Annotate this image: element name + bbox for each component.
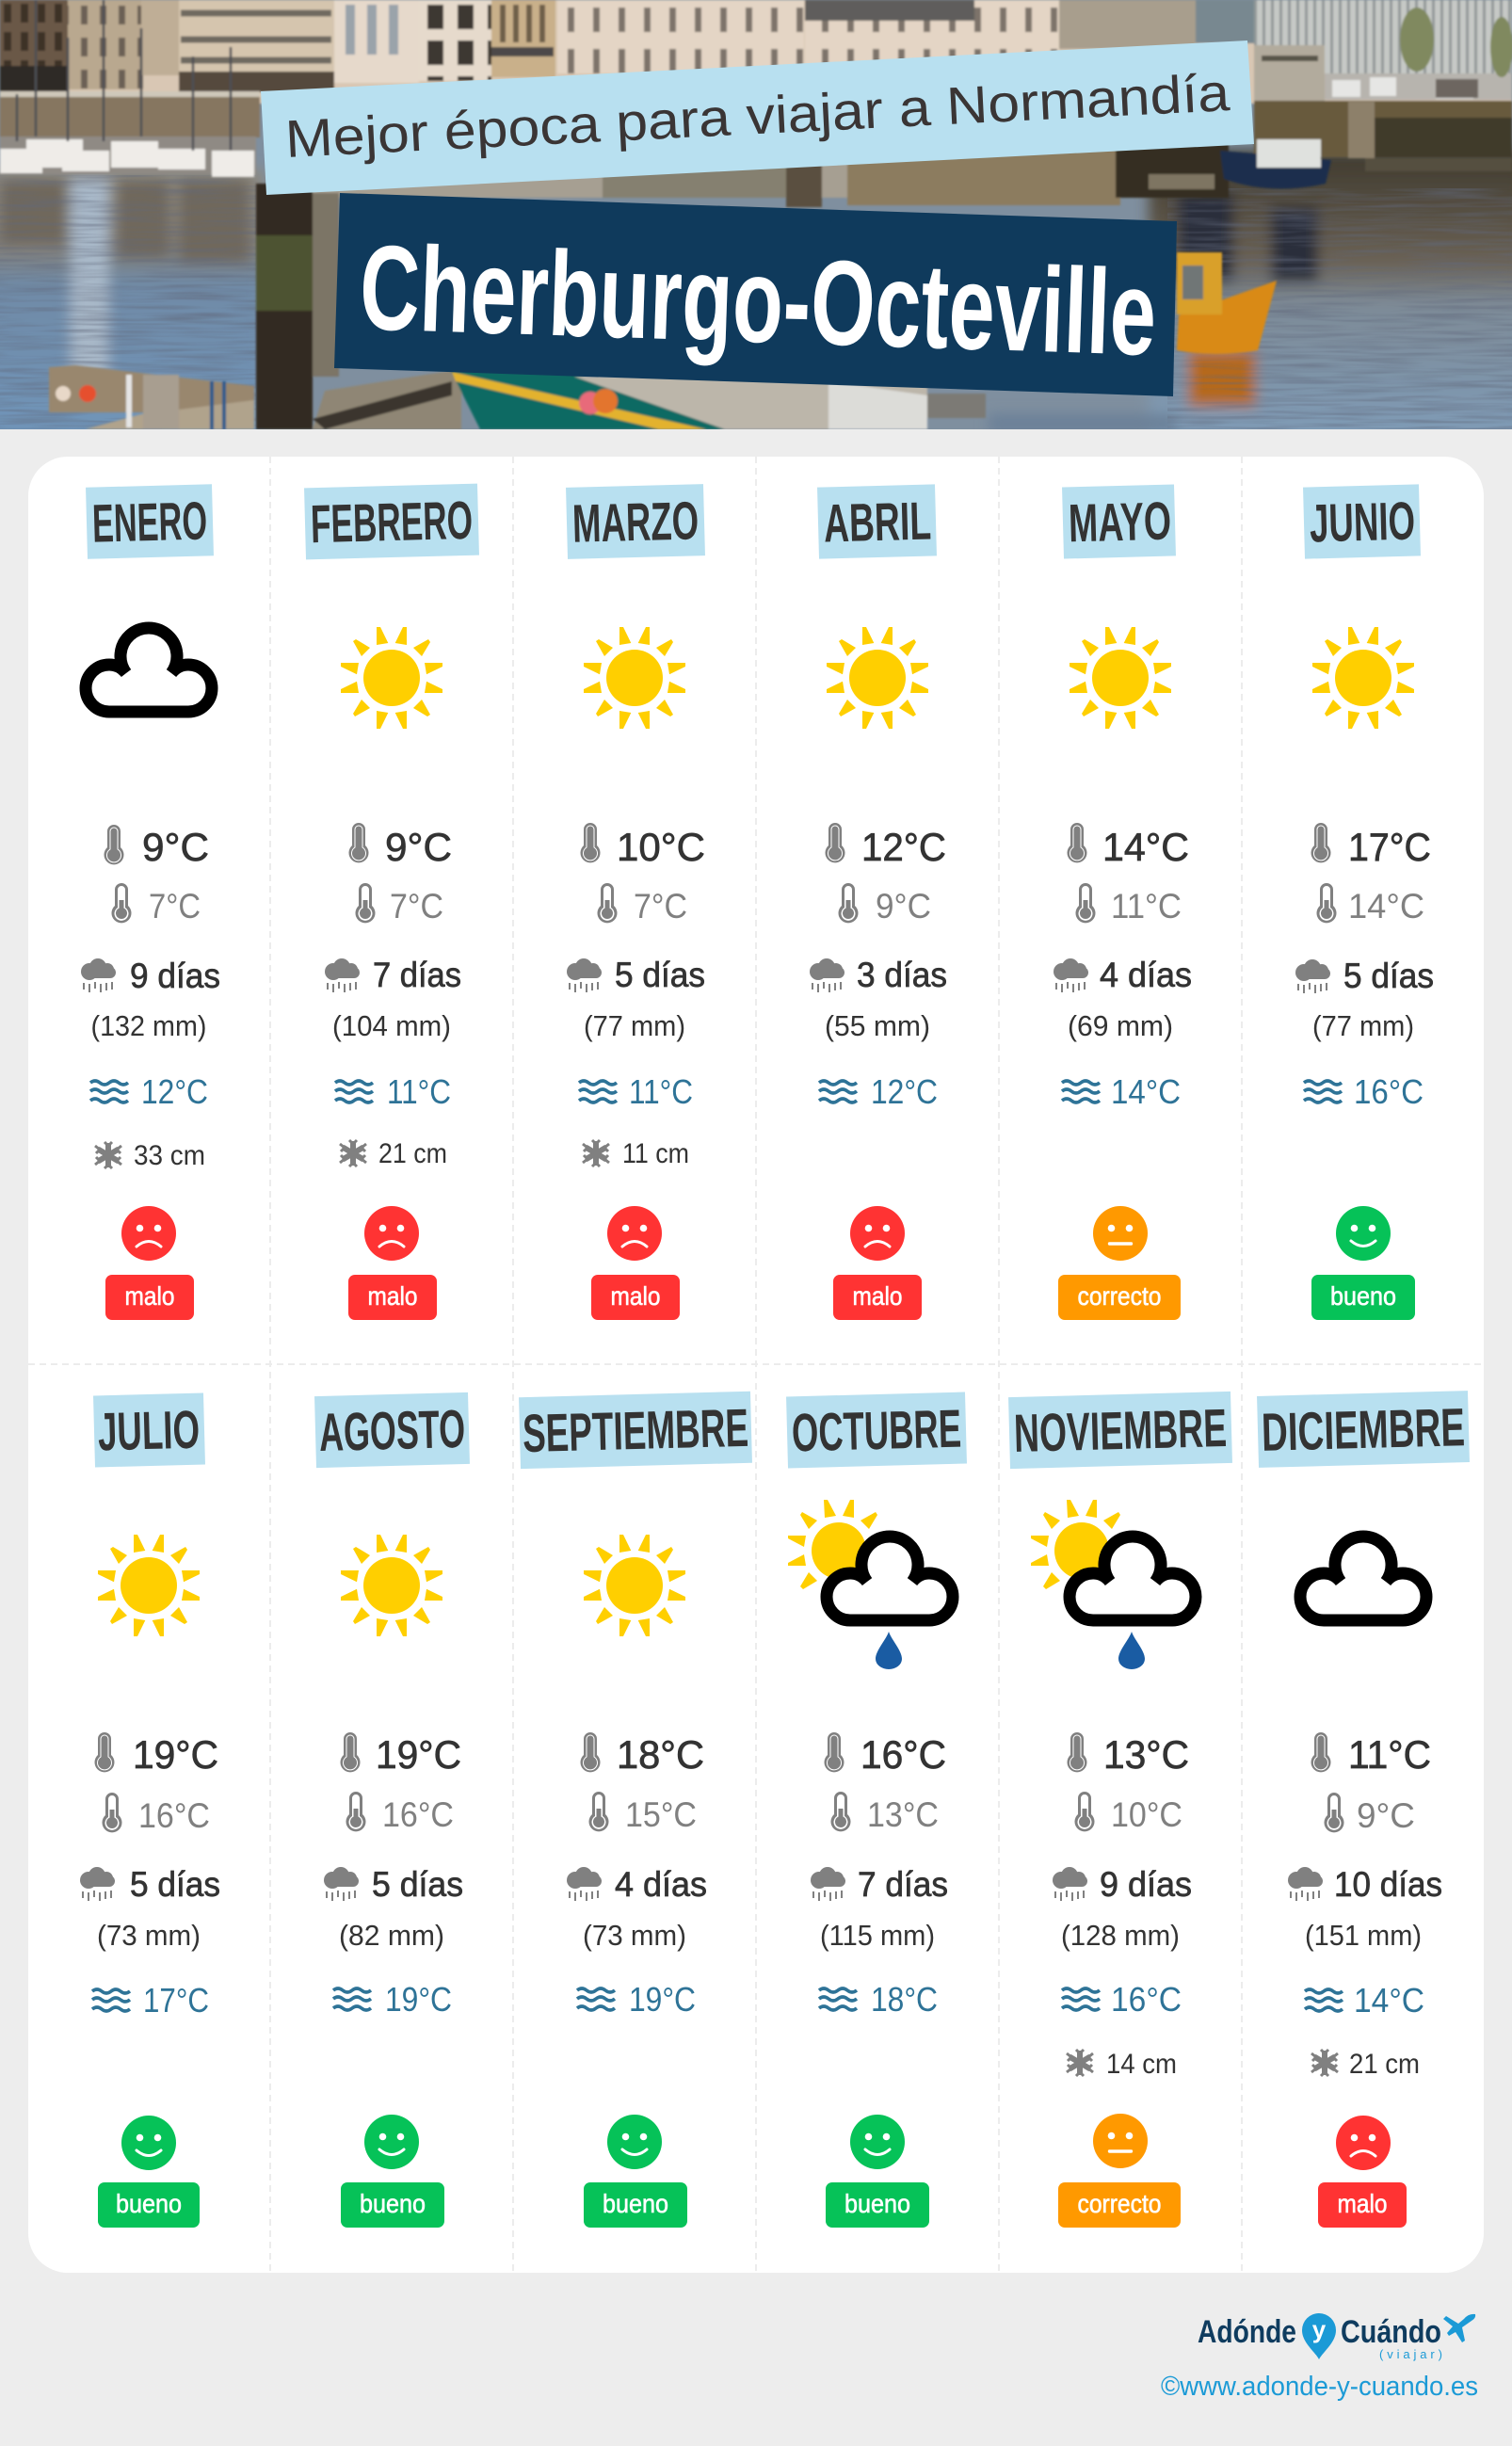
icon: sun	[98, 1535, 200, 1636]
rating: malo: malo	[610, 1281, 661, 1311]
icon: sun	[827, 627, 928, 729]
min temperature: 16°C	[382, 1795, 454, 1834]
rating: malo	[591, 1206, 680, 1320]
min temperature: 10°C	[1111, 1795, 1182, 1834]
sea temperature: 19°C	[629, 1980, 696, 2019]
rating: bueno	[584, 2115, 687, 2228]
month label	[86, 484, 214, 559]
sea temperature	[1305, 1981, 1424, 2020]
min temperature: 7°C	[149, 887, 201, 925]
sea temperature: 17°C	[143, 1981, 209, 2020]
max temperature: 9°C	[142, 825, 209, 869]
min temperature	[356, 883, 443, 925]
min temperature: 9°C	[1357, 1796, 1415, 1835]
sea temperature	[90, 1072, 208, 1111]
rating: malo: malo	[124, 1281, 175, 1311]
max temperature	[104, 825, 209, 869]
max temperature: 13°C	[1103, 1732, 1189, 1777]
max temperature	[1311, 1732, 1431, 1777]
icon: map pin with y: y	[1312, 2315, 1327, 2343]
month label: MAYO	[1068, 491, 1172, 554]
month label: NOVIEMBRE	[1013, 1398, 1228, 1464]
sea temperature	[333, 1980, 452, 2019]
month label	[304, 484, 479, 559]
sea temperature	[92, 1981, 209, 2020]
max temperature: 11°C	[1348, 1732, 1431, 1777]
snow: 11 cm	[622, 1138, 689, 1169]
icon: cloud	[1300, 1537, 1426, 1620]
max temperature	[580, 823, 705, 869]
min temperature	[346, 1792, 454, 1834]
panel: abril	[810, 484, 947, 1320]
min temperature: 15°C	[625, 1795, 697, 1834]
rating: bueno: bueno	[1330, 1281, 1396, 1311]
logo: Adónde y Cuándo viajar	[1198, 2313, 1475, 2361]
max temperature	[825, 1732, 946, 1777]
rainy days: 4 días	[615, 1865, 707, 1904]
snow	[1311, 2049, 1420, 2080]
rating: correcto: correcto	[1077, 2189, 1162, 2218]
max temperature	[825, 823, 946, 869]
rainfall: (73 mm)	[97, 1919, 201, 1952]
rating: correcto	[1058, 1206, 1181, 1320]
min temperature	[111, 883, 201, 925]
icon: sun	[584, 1535, 685, 1636]
rainfall: (77 mm)	[1312, 1009, 1414, 1042]
rainy days	[810, 956, 947, 994]
sea temperature	[335, 1072, 451, 1111]
rainfall: (132 mm)	[90, 1009, 207, 1042]
max temperature	[94, 1732, 218, 1777]
rainfall: (82 mm)	[339, 1919, 444, 1952]
sea temperature	[1062, 1980, 1182, 2019]
rainy days	[811, 1865, 948, 1904]
icon: sun	[584, 627, 685, 729]
snow	[583, 1138, 689, 1169]
rainy days: 9 días	[1100, 1865, 1192, 1904]
rainy days	[80, 1865, 220, 1904]
min temperature: 7°C	[390, 887, 443, 925]
panel: mayo	[1054, 484, 1192, 1320]
title banner	[334, 193, 1177, 396]
min temperature: 11°C	[1111, 887, 1182, 925]
snow	[95, 1140, 205, 1171]
rating: bueno: bueno	[603, 2189, 668, 2218]
min temperature	[1075, 1792, 1182, 1834]
month label: MARZO	[571, 491, 700, 555]
month label: AGOSTO	[318, 1399, 466, 1463]
rainy days: 9 días	[130, 957, 220, 995]
rainy days	[324, 1865, 463, 1904]
sea temperature: 14°C	[1111, 1072, 1181, 1111]
snow	[340, 1138, 447, 1169]
max temperature: 10°C	[617, 825, 705, 869]
rainy days: 4 días	[1100, 956, 1192, 994]
rainy days: 5 días	[130, 1865, 220, 1904]
rating: bueno: bueno	[844, 2189, 910, 2218]
rating: malo	[1318, 2116, 1407, 2228]
rainy days: 3 días	[857, 956, 947, 994]
rainy days	[1054, 956, 1192, 994]
icon: map pin with y	[1302, 2313, 1336, 2359]
month label: JUNIO	[1309, 491, 1416, 554]
rainy days	[1295, 957, 1434, 995]
sea temperature: 11°C	[629, 1072, 693, 1111]
min temperature	[1316, 883, 1424, 925]
rainfall: (55 mm)	[825, 1009, 930, 1042]
rating: bueno	[341, 2115, 444, 2228]
rating: bueno: bueno	[116, 2189, 182, 2218]
min temperature	[102, 1793, 210, 1835]
sea temperature: 16°C	[1111, 1980, 1182, 2019]
max temperature	[348, 823, 452, 869]
min temperature	[830, 1792, 939, 1834]
snow: 14 cm	[1106, 2049, 1177, 2080]
panel: enero	[81, 484, 220, 1320]
icon: sun	[1312, 627, 1414, 729]
max temperature: 18°C	[617, 1732, 704, 1777]
snow	[1067, 2049, 1177, 2080]
rainfall: (104 mm)	[332, 1009, 451, 1042]
sea temperature: 16°C	[1354, 1072, 1424, 1111]
sea temperature	[579, 1072, 693, 1111]
min temperature	[838, 883, 931, 925]
snow: 21 cm	[1349, 2049, 1420, 2080]
rainfall: (115 mm)	[820, 1919, 935, 1952]
rating: malo	[348, 1206, 437, 1320]
icon: plane	[1443, 2314, 1475, 2342]
month label	[1062, 484, 1176, 559]
month label: OCTUBRE	[791, 1399, 962, 1463]
subtitle banner	[261, 40, 1254, 195]
sea temperature	[1304, 1072, 1424, 1111]
website credit: ©www.adonde-y-cuando.es	[1161, 2372, 1478, 2402]
rainy days: 5 días	[615, 956, 705, 994]
min temperature: 13°C	[867, 1795, 939, 1834]
min temperature	[1075, 883, 1182, 925]
month label: ABRIL	[823, 491, 932, 554]
rating: bueno	[98, 2116, 200, 2228]
max temperature	[1068, 823, 1189, 869]
max temperature	[1311, 823, 1431, 869]
rating: bueno	[1311, 1206, 1415, 1320]
icon: sun, cloud and rain drop	[788, 1500, 953, 1669]
rating: bueno	[826, 2115, 929, 2228]
rainy days	[567, 1865, 707, 1904]
panel: agosto	[314, 1392, 470, 2228]
panel: junio	[1295, 484, 1434, 1320]
logo: Adónde y Cuándo viajar: Cuándo	[1341, 2314, 1441, 2350]
icon: sun	[1070, 627, 1171, 729]
rainy days: 7 días	[373, 956, 461, 994]
month label: ENERO	[91, 491, 208, 555]
sea temperature	[819, 1980, 938, 2019]
rating: malo	[833, 1206, 922, 1320]
icon: sun	[341, 627, 442, 729]
sea temperature: 18°C	[871, 1980, 938, 2019]
month label	[314, 1392, 470, 1468]
logo: Adónde y Cuándo viajar: (viajar)	[1379, 2347, 1442, 2361]
month label	[817, 484, 937, 559]
month label: SEPTIEMBRE	[522, 1398, 749, 1464]
month label	[93, 1392, 205, 1468]
panel: julio	[80, 1392, 220, 2228]
sea temperature	[1062, 1072, 1181, 1111]
month label	[519, 1392, 752, 1469]
sea temperature: 14°C	[1354, 1981, 1424, 2020]
min temperature	[597, 883, 687, 925]
rainy days: 7 días	[858, 1865, 948, 1904]
sea temperature: 11°C	[387, 1072, 451, 1111]
month label	[1303, 484, 1421, 559]
max temperature	[1068, 1732, 1189, 1777]
rating: bueno: bueno	[360, 2189, 426, 2218]
snow: 21 cm	[378, 1138, 447, 1169]
month label	[786, 1392, 967, 1468]
rating: malo: malo	[853, 1281, 902, 1311]
rainy days: 5 días	[372, 1865, 463, 1904]
rating: correcto: correcto	[1077, 1281, 1162, 1311]
panel: monthly climate table	[28, 457, 1484, 2273]
rainfall: (77 mm)	[584, 1009, 685, 1042]
rating: correcto	[1058, 2114, 1181, 2228]
rating: malo	[105, 1206, 194, 1320]
min temperature: 14°C	[1348, 887, 1424, 925]
rating: malo: malo	[367, 1281, 418, 1311]
rainy days	[325, 956, 461, 994]
rainy days	[81, 957, 220, 995]
min temperature: 9°C	[876, 887, 931, 925]
title text: Cherburgo-Octeville	[358, 220, 1158, 381]
max temperature: 14°C	[1102, 825, 1189, 869]
panel: noviembre	[1008, 1392, 1232, 2228]
rating: malo: malo	[1337, 2189, 1388, 2218]
header photo: harbour of Cherbourg	[0, 0, 1512, 443]
sea temperature: 12°C	[871, 1072, 938, 1111]
min temperature	[1324, 1793, 1415, 1835]
panel: marzo	[566, 484, 705, 1320]
max temperature: 17°C	[1348, 825, 1431, 869]
water ripples	[0, 175, 256, 429]
icon: cloud	[86, 628, 212, 712]
max temperature: 12°C	[861, 825, 946, 869]
month label	[1008, 1392, 1232, 1469]
rainfall: (128 mm)	[1061, 1919, 1180, 1952]
icon: sun	[341, 1535, 442, 1636]
sea temperature: 19°C	[385, 1980, 452, 2019]
max temperature	[341, 1732, 461, 1777]
icon: sun, cloud and rain drop	[1031, 1500, 1196, 1669]
month label	[566, 484, 705, 559]
min temperature	[589, 1792, 697, 1834]
panel: octubre	[786, 1392, 967, 2228]
rainfall: (69 mm)	[1068, 1009, 1173, 1042]
month label: FEBRERO	[310, 491, 474, 555]
max temperature: 19°C	[376, 1732, 461, 1777]
panel: diciembre	[1257, 1391, 1470, 2228]
max temperature: 9°C	[385, 825, 452, 869]
month label: JULIO	[97, 1400, 201, 1462]
subtitle text: Mejor época para viajar a Normandía	[283, 62, 1231, 169]
sea temperature	[577, 1980, 696, 2019]
snow: 33 cm	[134, 1140, 205, 1171]
min temperature: 7°C	[634, 887, 687, 925]
panel: febrero	[304, 484, 479, 1320]
logo: Adónde y Cuándo viajar: Adónde	[1198, 2314, 1296, 2350]
rainy days	[1053, 1865, 1192, 1904]
max temperature: 19°C	[133, 1732, 218, 1777]
rainfall: (73 mm)	[583, 1919, 686, 1952]
rainy days: 5 días	[1343, 957, 1434, 995]
rainy days	[567, 956, 705, 994]
max temperature: 16°C	[861, 1732, 946, 1777]
panel: septiembre	[519, 1392, 752, 2228]
rainfall: (151 mm)	[1305, 1919, 1422, 1952]
rainy days	[1288, 1865, 1442, 1904]
sea temperature	[819, 1072, 938, 1111]
min temperature: 16°C	[138, 1796, 210, 1835]
rainy days: 10 días	[1334, 1865, 1442, 1904]
sea temperature: 12°C	[141, 1072, 208, 1111]
